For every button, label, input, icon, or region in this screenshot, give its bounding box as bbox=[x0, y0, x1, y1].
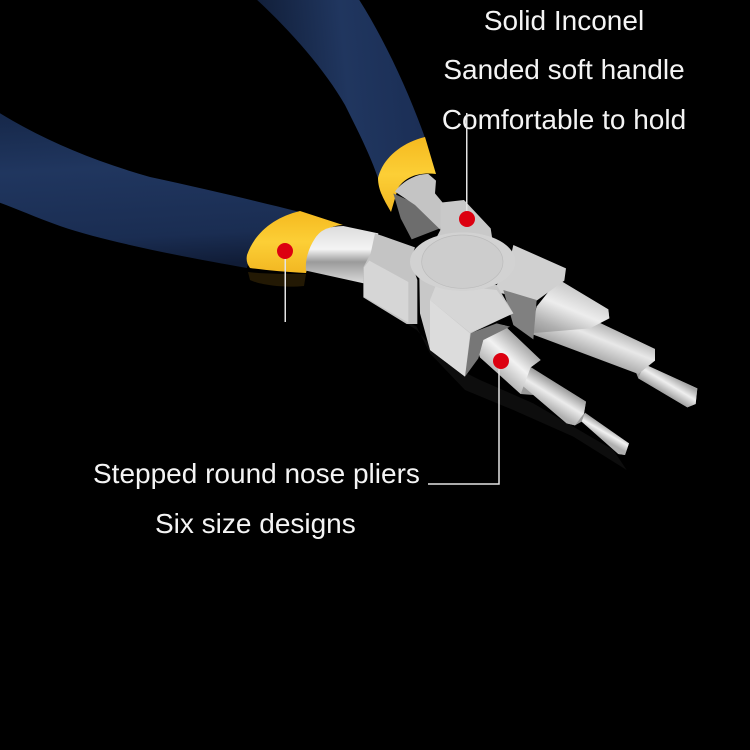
lower block top face bbox=[430, 283, 513, 333]
reflections under the metal bbox=[363, 297, 627, 470]
heading text: handle features: Sanded soft handle bbox=[443, 54, 685, 85]
metal joint and jaws (drawn in zoomed coordinates) bbox=[306, 174, 697, 470]
lower block bbox=[419, 277, 513, 377]
leader line: sleeve bbox=[284, 255, 286, 322]
lower shank bbox=[306, 226, 378, 284]
upper handle bbox=[255, 0, 436, 212]
pliers photo illustration bbox=[0, 0, 697, 470]
marker dot: joint bbox=[459, 211, 475, 227]
callout: stepped jaws bbox=[93, 353, 509, 539]
text: stepped pliers label: Stepped round nose pliers bbox=[93, 458, 420, 489]
heading text: handle features: Comfortable to hold bbox=[442, 104, 686, 135]
leader line: handle feature bbox=[466, 113, 468, 213]
lower block front face bbox=[430, 300, 470, 377]
lower handle bbox=[0, 112, 343, 287]
lower block collar bbox=[465, 323, 510, 377]
callout: handle material bbox=[442, 5, 686, 227]
lower jaw bbox=[477, 325, 629, 455]
heading text: handle features: Solid Inconel bbox=[484, 5, 644, 36]
leader line: jaws bbox=[428, 365, 499, 484]
pivot disc bbox=[410, 232, 515, 291]
right jaw bbox=[530, 279, 697, 407]
left block bbox=[363, 233, 417, 324]
marker dot: sleeve bbox=[277, 243, 293, 259]
left block front face bbox=[364, 261, 408, 323]
heading text: handle features bbox=[442, 5, 686, 135]
right block side bbox=[503, 290, 537, 339]
upper shank bbox=[393, 193, 440, 239]
upper block bbox=[430, 200, 494, 250]
right block bbox=[493, 245, 566, 301]
marker dot: jaws bbox=[493, 353, 509, 369]
text: six sizes label: Six size designs bbox=[155, 508, 356, 539]
callout: yellow sleeve bbox=[277, 243, 293, 322]
